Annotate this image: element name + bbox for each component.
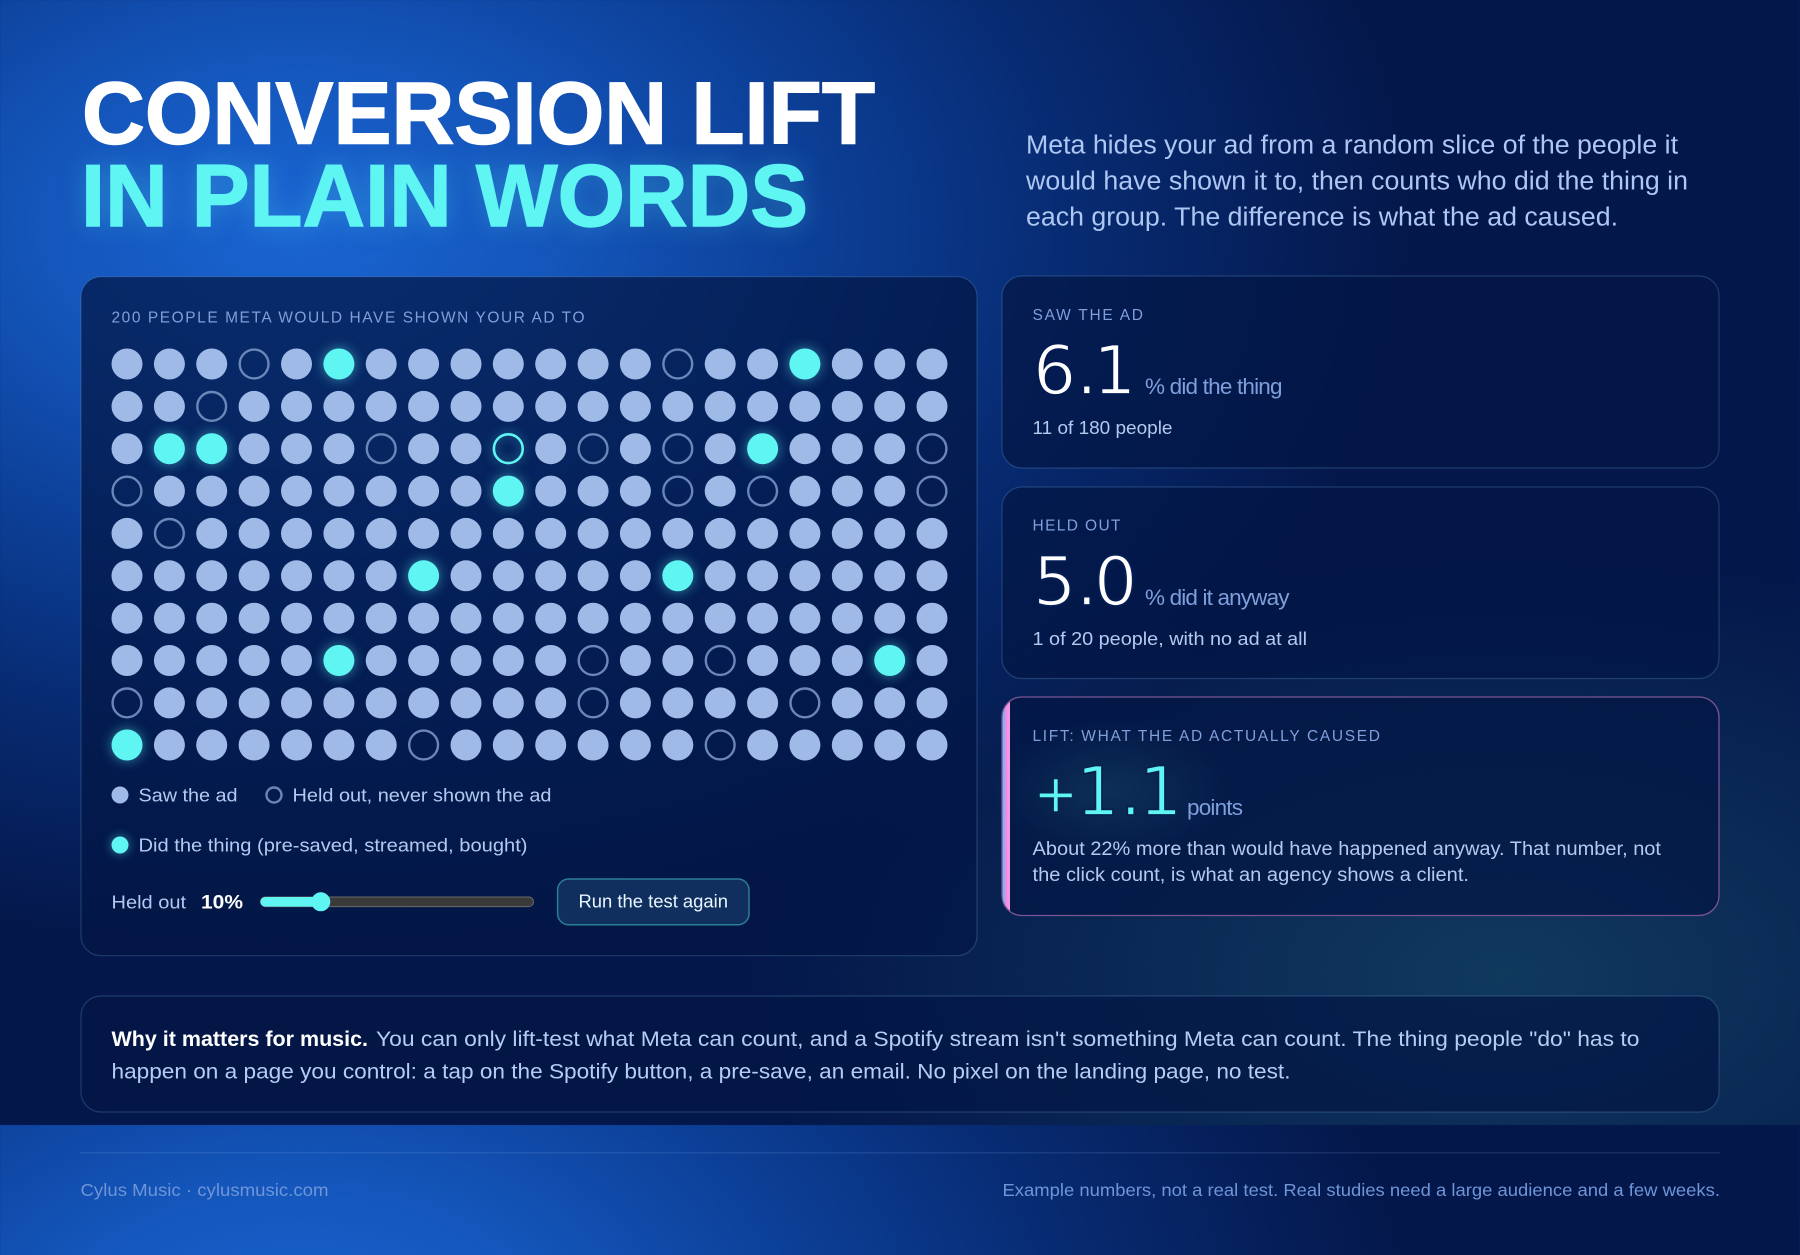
card note: 1 of 20 people, with no ad at all (1032, 628, 1307, 649)
held out value: 10% (201, 892, 243, 913)
title: IN PLAIN WORDS (81, 146, 808, 245)
stat unit: points (1187, 795, 1243, 820)
stat unit: % did it anyway (1145, 585, 1290, 610)
button (558, 879, 749, 925)
title (81, 64, 875, 245)
intro text (1025, 131, 1688, 232)
note: why it matters (81, 996, 1719, 1112)
stat value 5.0: 5.0 (1033, 543, 1137, 622)
note: why it matters: You can only lift-test what Meta can count, and a Spotify stream isn't something Meta can count. The thing people "do" has to (376, 1028, 1640, 1051)
card: lift (990, 697, 1719, 916)
panel: dot grid experiment (81, 277, 977, 956)
card label: SAW THE AD (1032, 307, 1143, 324)
lift explanation: About 22% more than would have happened anyway. That number, not (1032, 839, 1662, 860)
slider (260, 892, 534, 911)
stat value +1.1: + (1034, 765, 1078, 825)
footer: Cylus Music · cylusmusic.com (80, 1180, 328, 1200)
card note: 11 of 180 people (1032, 417, 1172, 438)
legend: did the thing: Did the thing (pre-saved, streamed, bought) (138, 835, 528, 856)
footer (80, 1152, 1720, 1200)
accent strip (1002, 702, 1010, 910)
card label: LIFT: WHAT THE AD ACTUALLY CAUSED (1032, 728, 1380, 745)
legend: saw the ad: Saw the ad (138, 785, 238, 806)
card: held out (1002, 487, 1719, 678)
held out value: Held out (112, 891, 186, 912)
held out value (112, 891, 243, 913)
card: saw the ad (1002, 276, 1719, 468)
footer: Example numbers, not a real test. Real studies need a large audience and a few weeks. (1002, 1180, 1720, 1200)
intro text: Meta hides your ad from a random slice of the people it (1026, 131, 1678, 159)
card label: HELD OUT (1032, 518, 1121, 535)
glow behind lift value (990, 720, 1230, 860)
intro text: each group. The difference is what the ad caused. (1026, 204, 1618, 232)
panel heading: 200 PEOPLE META WOULD HAVE SHOWN YOUR AD TO (112, 310, 584, 327)
dot grid: 200 people (112, 348, 948, 760)
stat value 6.1: 6.1 (1033, 332, 1136, 411)
note: why it matters: Why it matters for music. (112, 1028, 368, 1051)
button: Run the test again (578, 891, 728, 911)
stat value +1.1: 1.1 (1076, 753, 1182, 832)
note: why it matters: happen on a page you control: a tap on the Spotify button, a pre-save, an email. No pixel on the landing page, no test. (112, 1060, 1290, 1083)
title: CONVERSION LIFT (82, 64, 875, 162)
legend: held out: Held out, never shown the ad (292, 785, 552, 806)
card: lift: the click count, is what an agency shows a client. (1032, 865, 1469, 886)
intro text: would have shown it to, then counts who did the thing in (1025, 167, 1688, 195)
stat unit: % did the thing (1145, 374, 1282, 399)
